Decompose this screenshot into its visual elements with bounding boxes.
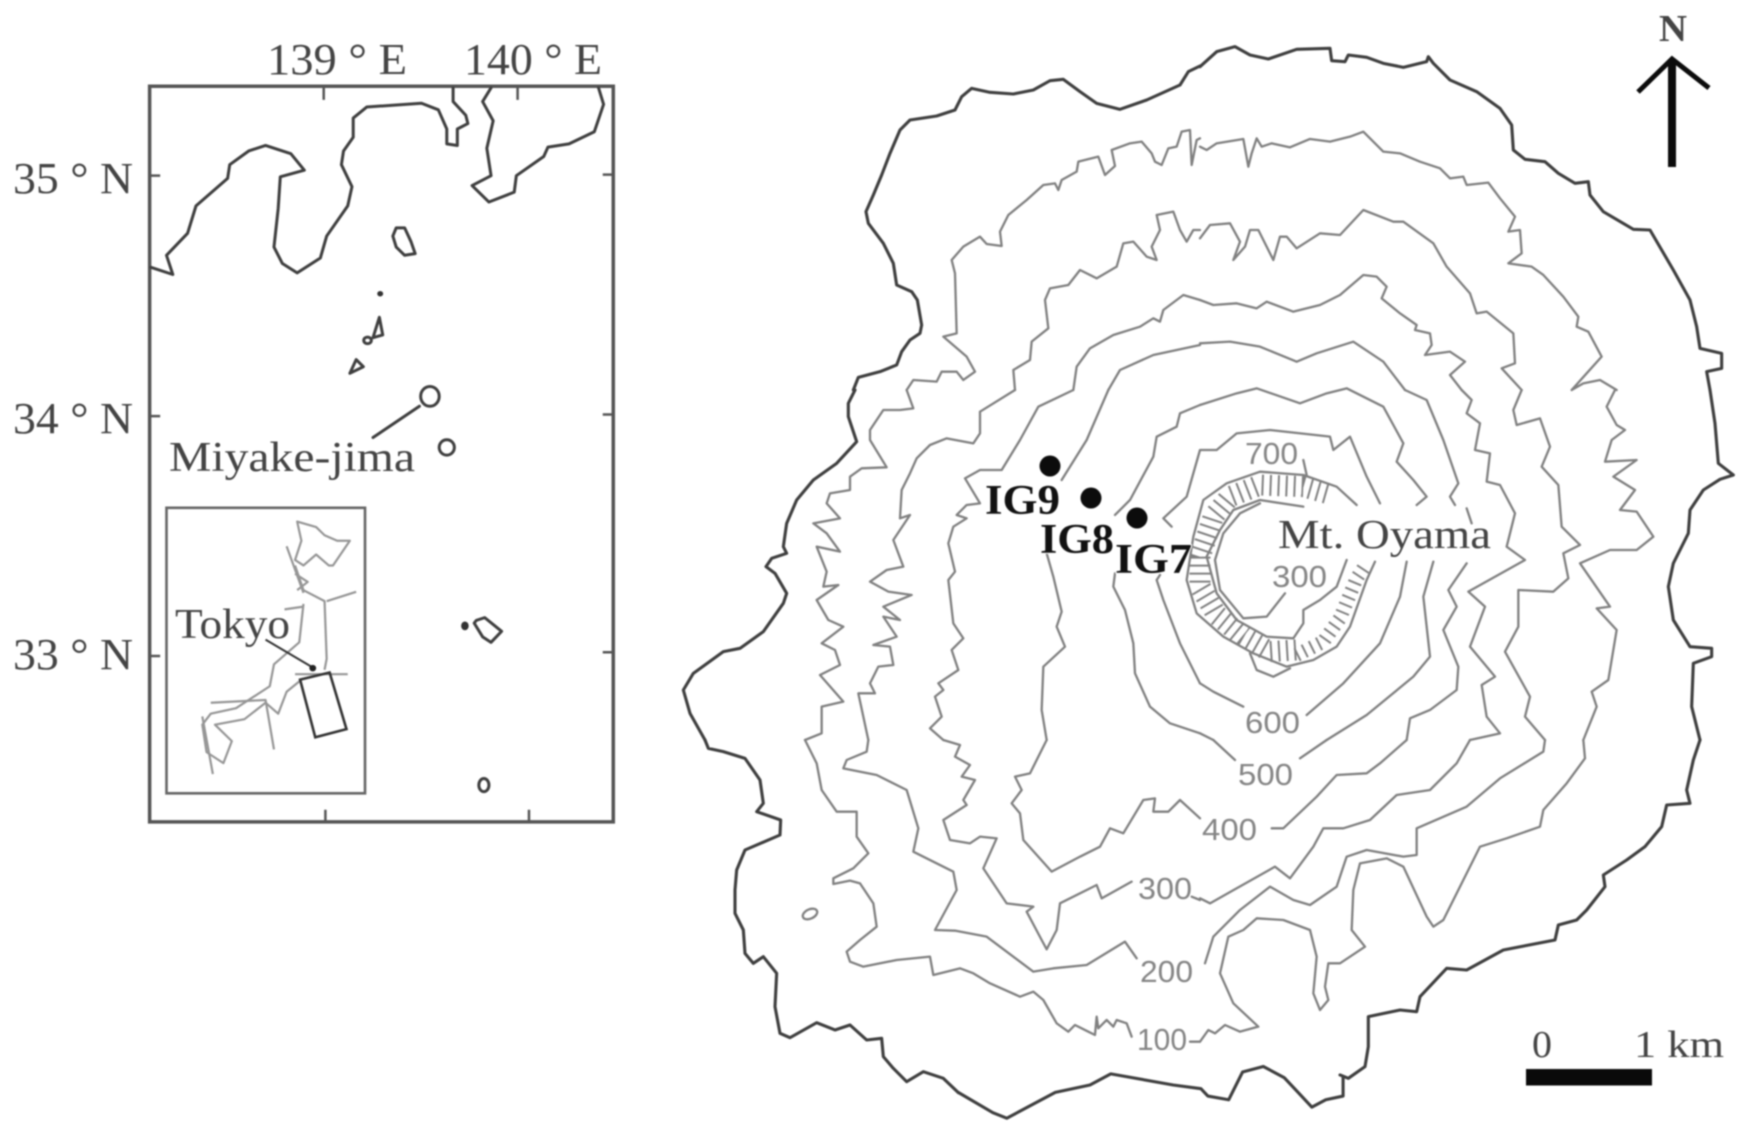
contour label 100: 100 [1137,1022,1187,1057]
contour 200 m [843,210,1580,972]
contour label 300 in crater: 300 [1272,559,1327,594]
scale bar: 1 km [1634,1024,1724,1066]
panel: island topographic map [683,8,1733,1118]
contour label 200: 200 [1140,954,1193,989]
scale bar: 0 [1532,1024,1552,1066]
sample site IG7: IG7 [1115,537,1192,583]
contour 600 m [1157,430,1407,715]
sample site IG7 [1115,508,1192,583]
contour 300 m [930,275,1525,949]
map frame with ticks [150,86,613,822]
scale bar [1526,1024,1724,1086]
north arrow: N [1659,8,1687,50]
contour label 400: 400 [1202,812,1257,847]
label Tokyo: Tokyo [175,602,290,648]
label Miyake-jima: Miyake-jima [169,435,415,481]
summit crater of Mt. Oyama [1187,460,1375,677]
Izu islands [350,228,502,792]
north arrow [1638,8,1709,167]
longitude label 139: 139 ° E [267,35,407,84]
longitude label 140: 140 ° E [464,35,602,84]
contour label 700: 700 [1245,436,1298,471]
panel: location map [13,35,613,822]
latitude label 33: 33 ° N [13,630,133,679]
latitude label 34: 34 ° N [13,394,133,443]
contour label 300: 300 [1138,871,1192,906]
coastline of island [683,47,1733,1118]
sample site IG9: IG9 [985,478,1060,524]
contour label 600: 600 [1245,705,1300,740]
coastline of Honshu [151,88,604,275]
latitude label 35: 35 ° N [13,154,133,203]
sample site IG9 [985,456,1060,524]
sample site IG8: IG8 [1040,517,1114,563]
contour 100 m [805,130,1653,1042]
contour 500 m [1113,388,1433,760]
sample site IG8 [1040,488,1114,563]
contour 400 m [1012,342,1472,872]
label Mt. Oyama: Mt. Oyama [1278,511,1491,557]
small contour islet [801,907,819,921]
contour label 500: 500 [1238,757,1293,792]
inset map of Japan [166,508,365,793]
